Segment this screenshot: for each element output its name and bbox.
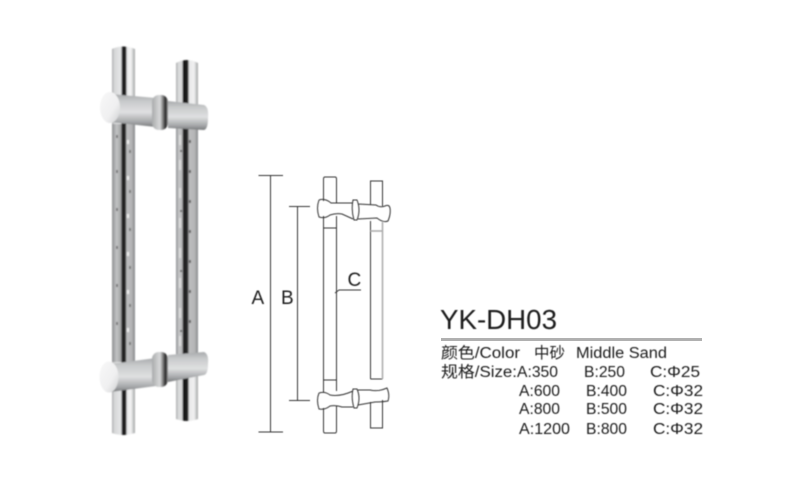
leader for C — [335, 290, 361, 293]
size row 1 — [441, 363, 700, 381]
size row 2: A:600 — [519, 383, 560, 400]
size row 4: C:Φ32 — [653, 421, 703, 438]
bottom connector outline — [318, 388, 389, 409]
dimension labels: B — [281, 288, 294, 309]
size row 2: B:400 — [586, 383, 627, 400]
colour row: Middle Sand — [576, 345, 667, 362]
dimension labels: A — [252, 288, 264, 309]
colour row: 颜色/Color — [441, 344, 520, 362]
dimension drawing — [258, 176, 390, 433]
size row 1: B:250 — [584, 364, 625, 381]
right tube outline — [370, 181, 382, 428]
size row 1: C:Φ25 — [650, 364, 700, 381]
size row 2: C:Φ32 — [653, 383, 703, 400]
size row 1: 规格/Size: — [441, 363, 517, 381]
size row 4: A:1200 — [519, 421, 570, 438]
specification text — [441, 344, 703, 438]
size row 3: C:Φ32 — [653, 401, 703, 418]
dimension A — [258, 176, 283, 432]
left tube outline — [324, 177, 336, 433]
size row 1: A:350 — [517, 364, 558, 381]
dimension labels: C — [348, 270, 361, 291]
top connector — [100, 92, 208, 130]
size row 2 — [519, 383, 703, 400]
size row 3: B:500 — [586, 401, 627, 418]
product photo: door handle — [100, 46, 208, 435]
right tube shaded edge — [370, 222, 382, 379]
size row 4: B:800 — [586, 421, 627, 438]
size row 3 — [519, 401, 703, 418]
size row 4 — [519, 421, 703, 438]
top connector outline — [318, 199, 390, 222]
colour row — [441, 344, 667, 362]
size row 3: A:800 — [519, 401, 560, 418]
dimension labels — [252, 270, 361, 309]
left tube — [112, 46, 135, 435]
colour row: 中砂 — [534, 344, 565, 362]
right tube — [176, 60, 198, 421]
title rule — [441, 338, 702, 341]
bottom connector — [100, 352, 208, 392]
model title: YK-DH03 — [440, 304, 557, 335]
dimension B — [289, 206, 310, 400]
